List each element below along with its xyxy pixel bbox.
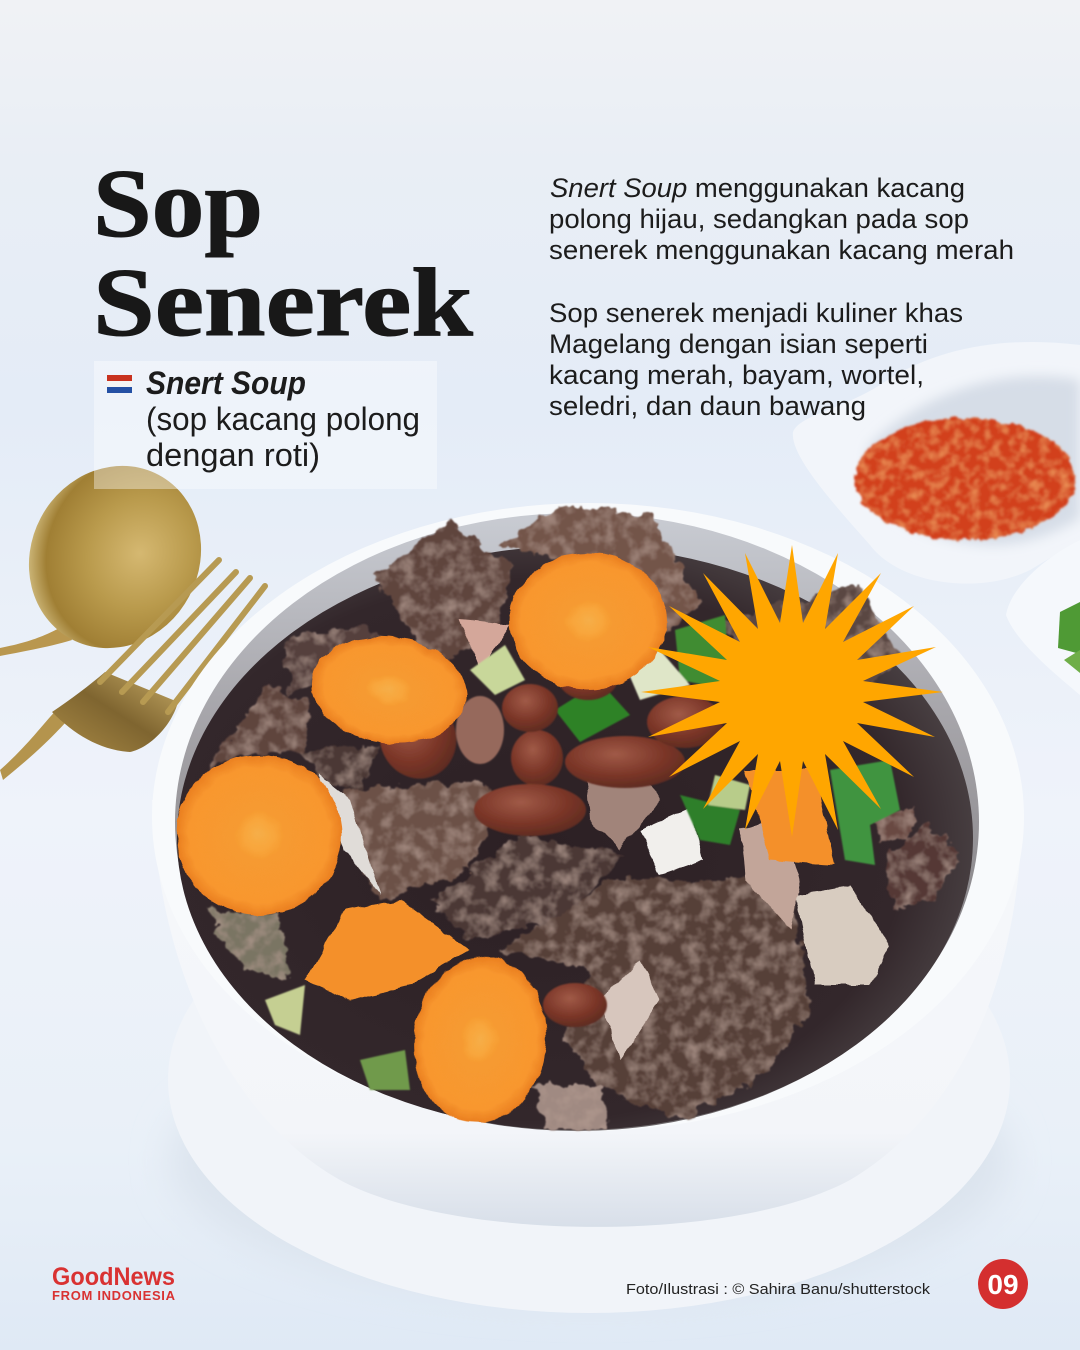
description text: Sop senerek menjadi kuliner khas xyxy=(549,298,963,328)
side dish with greens xyxy=(1006,540,1080,695)
gold spoon xyxy=(0,435,233,679)
callout text: (sop kacang polong xyxy=(146,401,420,437)
bowl body xyxy=(152,800,1023,1227)
beans xyxy=(368,656,723,1027)
description text xyxy=(549,173,1014,421)
saucer xyxy=(168,847,1010,1313)
page number badge: 09 xyxy=(987,1269,1019,1300)
bowl rim xyxy=(152,503,1024,1131)
description text: Snert Soup menggunakan kacang xyxy=(550,173,965,203)
callout text: dengan roti) xyxy=(146,437,320,473)
bowl inner wall xyxy=(175,513,979,1131)
gold fork xyxy=(0,560,265,780)
title xyxy=(93,150,473,356)
soup xyxy=(177,546,973,1130)
carrot slices xyxy=(176,553,835,1131)
green onion xyxy=(265,615,900,1090)
sunburst xyxy=(641,545,943,837)
logo: GoodNews from Indonesia: FROM INDONESIA xyxy=(52,1288,176,1303)
plate shadow xyxy=(170,1020,1010,1300)
chili sauce dish xyxy=(793,342,1080,584)
fatty pieces xyxy=(318,620,890,1060)
description text: Magelang dengan isian seperti xyxy=(549,329,928,359)
title: Senerek xyxy=(93,249,473,356)
icon: dutch flag xyxy=(107,375,132,393)
title: Sop xyxy=(93,150,263,257)
logo: GoodNews from Indonesia: GoodNews xyxy=(52,1263,175,1291)
callout: snert soup xyxy=(94,361,437,489)
description text: seledri, dan daun bawang xyxy=(549,391,866,421)
callout text: Snert Soup xyxy=(146,365,306,401)
food xyxy=(176,505,960,1131)
description text: senerek menggunakan kacang merah xyxy=(549,235,1014,265)
logo: GoodNews from Indonesia xyxy=(52,1263,176,1303)
photo: table setting and soup bowl xyxy=(0,342,1080,1313)
description text: kacang merah, bayam, wortel, xyxy=(549,360,924,390)
meat pieces xyxy=(200,505,960,1130)
description text: polong hijau, sedangkan pada sop xyxy=(549,204,969,234)
photo credit: Foto/Ilustrasi : © Sahira Banu/shutterstock xyxy=(626,1281,931,1298)
page number badge xyxy=(978,1259,1028,1309)
callout text xyxy=(146,365,420,473)
